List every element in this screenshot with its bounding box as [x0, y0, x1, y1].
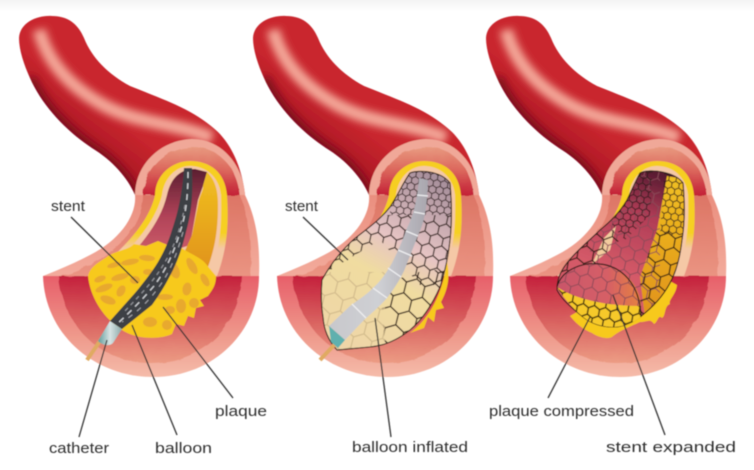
mesh: centre 3 [590, 170, 660, 315]
lumen 1 [125, 169, 207, 262]
pale highlights 3 [592, 226, 616, 264]
mesh: upper 3 [612, 171, 684, 240]
stent rim [557, 264, 641, 317]
stent mesh 2 [322, 171, 452, 350]
leader lines 1 [71, 217, 233, 437]
label: catheter: catheter [49, 440, 109, 457]
label: balloon: balloon [155, 440, 212, 457]
label: stent: stent [51, 198, 86, 215]
leader lines 3 [548, 295, 665, 435]
artery 1 [19, 16, 259, 377]
top fade band [0, 0, 754, 12]
artery 3 [486, 16, 726, 377]
catheter tip 1 [98, 321, 122, 345]
panel 3: stent expanded [486, 16, 736, 456]
stent opening [557, 262, 642, 328]
label: stent: stent [285, 198, 319, 215]
panel 1: catheter and balloon inserted [19, 16, 267, 457]
inflated balloon 2 [320, 170, 453, 352]
label: stent expanded: stent expanded [606, 439, 736, 456]
gold plaque behind stent 3 [640, 175, 684, 313]
gold plaque wall 1 [180, 172, 218, 272]
leader lines 2 [303, 217, 391, 437]
compressed plaque drips 3 [570, 270, 677, 338]
panel 2: balloon inflated [253, 16, 493, 456]
balloon with stent 1 [110, 168, 192, 329]
artery 2 [253, 16, 493, 377]
label: balloon inflated: balloon inflated [352, 439, 468, 456]
catheter wire 1 [87, 338, 102, 360]
catheter wire 2 [320, 343, 336, 360]
plaque 1 [88, 241, 216, 338]
catheter core 2 [329, 178, 428, 348]
expanded stent 3 [555, 165, 690, 327]
mesh: lower 3 [561, 225, 683, 314]
squeezed plaque 2 [410, 262, 448, 333]
crescent of compressed plaque [557, 287, 642, 328]
label: plaque: plaque [215, 403, 267, 420]
label: plaque compressed: plaque compressed [489, 403, 634, 420]
